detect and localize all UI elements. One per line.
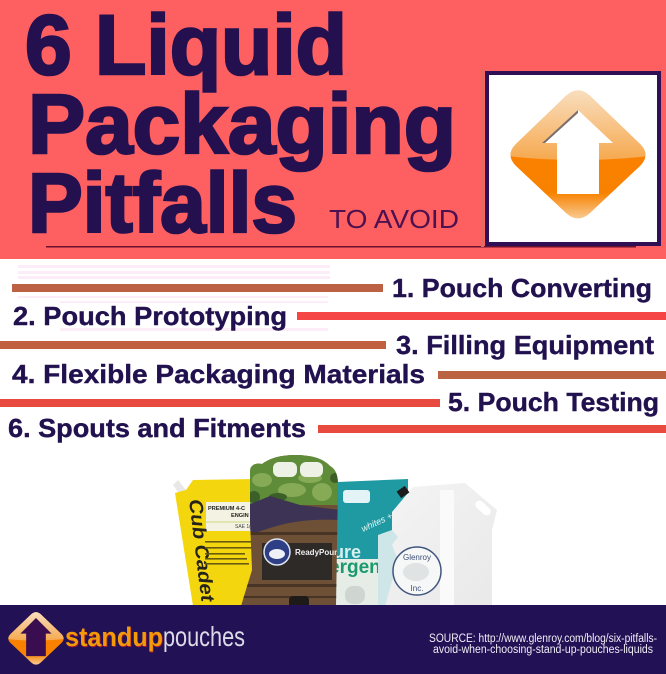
footer logo: pouches	[163, 621, 245, 652]
item 2: 2. Pouch Prototyping	[13, 301, 287, 331]
item 4	[12, 359, 666, 389]
list	[0, 273, 666, 443]
title: 6 Liquid	[25, 0, 347, 92]
pouch: clear	[378, 483, 497, 606]
title	[25, 0, 456, 250]
icon: footer diamond arrow	[4, 608, 68, 665]
subtitle: to avoid: TO AVOID	[329, 204, 459, 234]
item 3	[0, 330, 654, 360]
title: Pitfalls	[28, 156, 297, 250]
footer logo	[4, 608, 245, 665]
footer logo: standup	[65, 622, 163, 652]
item 6: 6. Spouts and Fitments	[8, 413, 306, 443]
pouch: grape	[241, 455, 338, 605]
item 5	[0, 387, 659, 417]
logo box	[481, 69, 659, 247]
pouches photo	[173, 450, 497, 610]
pouch: clear: Inc.	[411, 584, 423, 593]
pouch: yellow: ENGIN	[231, 513, 249, 519]
pouch: teal detergent: ergen	[329, 557, 381, 578]
pouch: yellow: SAE 1(	[235, 524, 251, 530]
pouch handle holes	[273, 462, 323, 477]
pouch: yellow: PREMIUM 4-C	[208, 506, 245, 512]
item 4: 4. Flexible Packaging Materials	[12, 359, 425, 389]
pouch: yellow	[173, 479, 255, 606]
pouch: teal detergent: whites + dirty	[360, 502, 412, 534]
footer band	[0, 605, 666, 674]
logo wordmark: standup	[66, 623, 164, 653]
pouch: yellow: Cub Cadet	[184, 498, 218, 604]
source credit	[429, 633, 657, 656]
item 5: 5. Pouch Testing	[448, 387, 659, 417]
item 3: 3. Filling Equipment	[396, 330, 654, 360]
pouch: grape: ReadyPour	[295, 548, 337, 557]
item 1	[12, 273, 652, 303]
header background	[0, 0, 666, 259]
item 1: 1. Pouch Converting	[392, 273, 652, 303]
pouch: teal detergent: ure	[333, 542, 361, 562]
icon: orange diamond up arrow	[500, 80, 656, 218]
title: Packaging	[28, 77, 456, 171]
header rule	[46, 246, 636, 248]
pouch: teal detergent	[336, 479, 408, 605]
pouch: clear: Glenroy	[403, 553, 431, 562]
decorative compression ghost	[18, 265, 330, 331]
item 2	[13, 301, 666, 331]
item 6	[8, 413, 666, 443]
